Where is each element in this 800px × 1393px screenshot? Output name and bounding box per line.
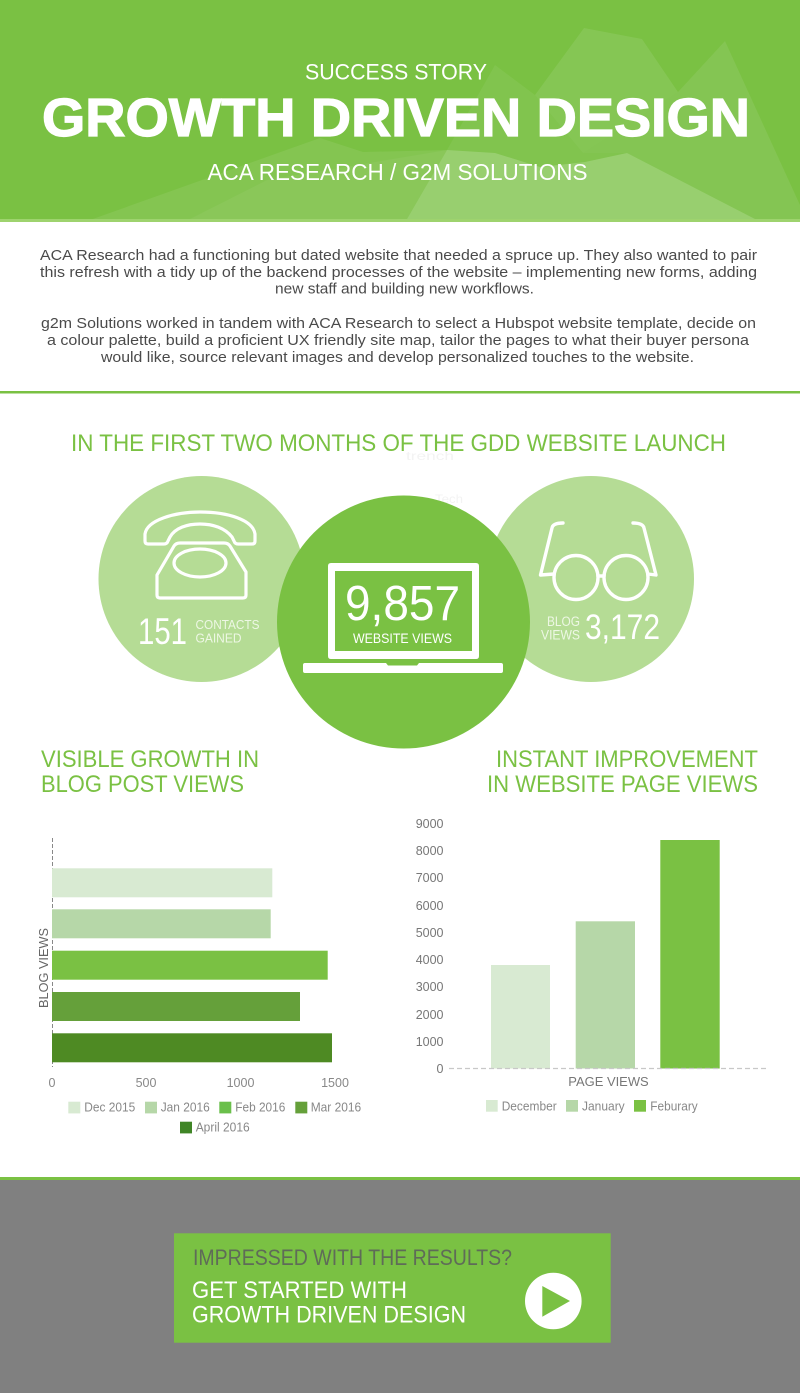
bars [52,868,332,1062]
faint stray labels: Tech [435,492,463,506]
y axis labels: 6000 [416,899,444,913]
legend: Feb 2016 [235,1101,285,1115]
text block: introduction: g2m Solutions worked in tandem with ACA Research to select a Hubspot website template, decide on [41,315,756,332]
legend: Jan 2016 [161,1101,210,1115]
x axis labels: 1500 [321,1076,349,1090]
text block: introduction: would like, source relevant images and develop personalized touches to the website. [100,349,694,366]
stat: 151 contacts gained [138,611,260,652]
panel: footer [0,1177,800,1393]
legend: Feburary [650,1100,698,1114]
panel: website views circle [277,496,530,748]
y axis labels: 9000 [416,817,444,831]
legend: Mar 2016 [311,1101,361,1115]
heading: blog post views: VISIBLE GROWTH IN [41,746,259,773]
legend: January [582,1100,625,1114]
text block: introduction: ACA Research had a functioning but dated website that needed a spruce up. They also wanted to pair [40,247,757,264]
title: growth driven design: GROWTH DRIVEN DESIGN [42,88,750,148]
cta question: IMPRESSED WITH THE RESULTS? [193,1245,512,1270]
subtitle: ACA RESEARCH / G2M SOLUTIONS [208,159,588,185]
text block: introduction: new staff and building new workflows. [275,280,534,298]
stat: 3,172 blog views [541,608,660,647]
bar chart: page views [416,817,768,1114]
y axis labels: 0 [437,1062,444,1076]
cta text: GET STARTED WITH [192,1277,407,1304]
legend: April 2016 [196,1121,250,1135]
bars [491,840,720,1068]
call to action button [174,1233,611,1343]
legend [486,1100,698,1114]
icon: telephone [145,512,255,598]
y axis labels: 8000 [416,844,444,858]
stat: 151 contacts gained: CONTACTS [196,617,260,632]
heading: blog post views [41,746,259,798]
text block: introduction [40,247,757,366]
text block: introduction: a colour palette, build a proficient UX friendly site map, tailor the pages to what their buyer persona [47,332,750,349]
panel: blog views circle [488,476,694,682]
stat: 3,172 blog views: 3,172 [585,608,660,647]
x axis labels: 1000 [227,1076,254,1090]
stat: 151 contacts gained: 151 [138,611,187,652]
icon: play button [525,1273,582,1329]
y axis labels: 4000 [416,953,444,967]
stat: 3,172 blog views: BLOG [547,614,580,629]
icon: glasses [540,523,656,600]
bar chart: blog views [36,838,361,1135]
y axis labels: 7000 [416,871,444,885]
y axis labels [416,817,444,1076]
x axis labels [49,1076,349,1090]
y axis labels: 3000 [416,980,444,994]
stat: 9,857 website views: WEBSITE VIEWS [353,630,452,646]
y axis labels: 1000 [416,1035,444,1049]
heading: page views: IN WEBSITE PAGE VIEWS [487,771,758,798]
panel: header [0,0,800,222]
y axis labels: 5000 [416,926,444,940]
panel: contacts circle [98,476,304,682]
heading: first two months: IN THE FIRST TWO MONTHS OF THE GDD WEBSITE LAUNCH [71,430,726,457]
heading: blog post views: BLOG POST VIEWS [41,771,244,798]
faint stray labels [406,449,463,506]
x axis labels: 500 [136,1076,156,1090]
axis title: PAGE VIEWS [568,1074,649,1089]
axis title: BLOG VIEWS [36,928,51,1008]
x axis labels: 0 [49,1076,56,1090]
heading: page views [487,746,758,798]
icon: laptop [303,563,503,673]
heading: page views: INSTANT IMPROVEMENT [496,746,758,773]
cta text: GROWTH DRIVEN DESIGN [192,1302,466,1328]
text block: introduction: this refresh with a tidy up of the backend processes of the website – implementing new forms, adding [40,264,757,281]
legend: Dec 2015 [84,1101,135,1115]
legend [68,1101,361,1135]
cta text [192,1277,466,1328]
stat: 3,172 blog views: VIEWS [541,628,580,642]
y axis labels: 2000 [416,1008,444,1022]
faint stray labels: trench [406,449,454,463]
title: success story: SUCCESS STORY [305,60,487,84]
stat: 9,857 website views: 9,857 [345,577,460,631]
legend: December [502,1100,557,1114]
stat: 151 contacts gained: GAINED [196,630,242,646]
